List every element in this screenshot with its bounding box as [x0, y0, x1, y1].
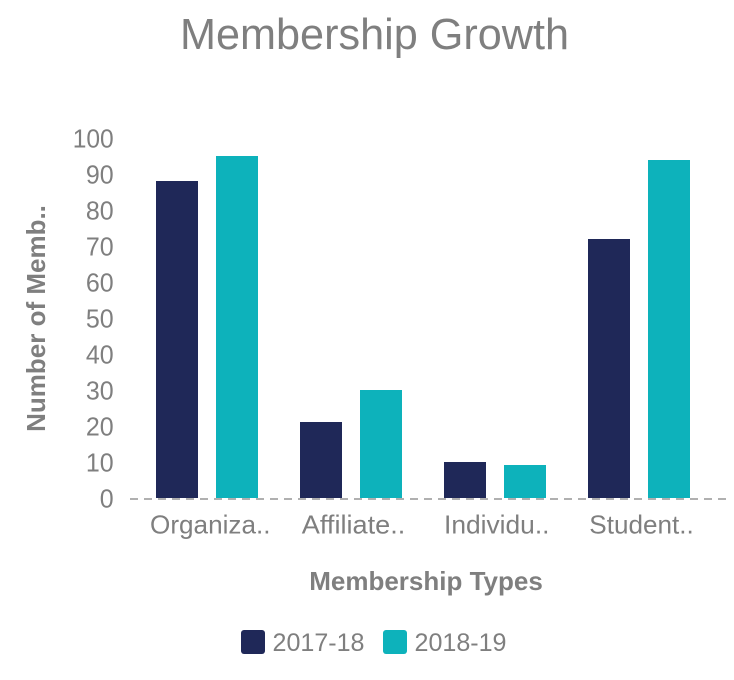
- y axis labels: 70: [86, 232, 114, 262]
- legend: 2017-18: 2017-18: [272, 629, 364, 657]
- bars: Individual: [444, 462, 546, 498]
- x axis labels: Student..: [589, 510, 694, 540]
- x axis title: Membership Types: [309, 566, 543, 596]
- y axis labels: 90: [86, 160, 114, 190]
- x axis labels: [150, 510, 694, 540]
- bars: Affiliate: [300, 390, 402, 498]
- y axis labels: [73, 124, 114, 514]
- y axis labels: 80: [86, 196, 114, 226]
- y axis labels: 30: [86, 376, 114, 406]
- y axis title: Number of Memb..: [21, 205, 51, 432]
- y axis labels: 20: [86, 412, 114, 442]
- y axis labels: 100: [73, 124, 114, 154]
- y axis labels: 40: [86, 340, 114, 370]
- x axis labels: Individu..: [444, 510, 550, 540]
- x axis labels: Affiliate..: [302, 510, 405, 540]
- y axis labels: 60: [86, 268, 114, 298]
- y axis labels: 10: [86, 448, 114, 478]
- title: Membership Growth: [180, 10, 569, 59]
- bars: Student: [588, 160, 690, 498]
- legend: 2018-19: 2018-19: [414, 629, 506, 657]
- bar chart: [156, 156, 690, 498]
- x axis labels: Organiza..: [150, 510, 270, 540]
- legend: [241, 629, 506, 657]
- y axis labels: 50: [86, 304, 114, 334]
- bars: Organization: [156, 156, 258, 498]
- y axis labels: 0: [100, 484, 114, 514]
